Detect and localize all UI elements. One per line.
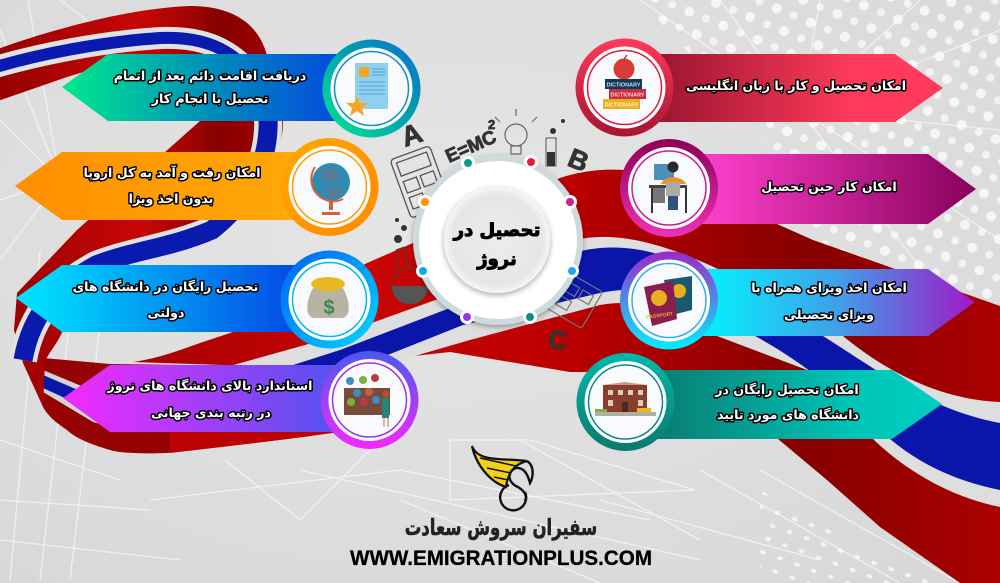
title: تحصیل در [453, 220, 540, 241]
panel: europe travel [15, 138, 378, 236]
title [453, 220, 540, 270]
panel: central hub [413, 155, 583, 325]
icon: classroom [344, 374, 390, 427]
icon: passports [644, 276, 692, 326]
icon circle [280, 250, 378, 348]
doodle: calculator [390, 146, 451, 218]
ribbon: white stripe [230, 237, 1000, 507]
text: امکان تحصیل و کار با زبان انگلیسی [686, 78, 906, 93]
ribbon: upper white stripe [0, 38, 268, 360]
doodle: letter B: B [564, 143, 593, 178]
hub: connector dots [418, 156, 578, 322]
icon: money bag [307, 277, 349, 319]
panel: permanent residence [62, 40, 420, 138]
text: در رتبه بندی جهانی [151, 405, 271, 420]
doodle: flask [392, 247, 428, 304]
text [714, 382, 860, 422]
text: امکان کار حین تحصیل [761, 179, 897, 194]
icon: dictionaries with apple: DICTIONARY [606, 82, 641, 88]
doodle: formula: E=MC [442, 127, 500, 168]
doodle: second calculator [547, 272, 603, 328]
text [751, 280, 907, 322]
icon: dictionaries with apple [603, 55, 646, 109]
icon: dictionaries with apple: DICTIONARY [610, 92, 645, 98]
panel: companion visa [620, 252, 975, 350]
banner [62, 54, 350, 121]
banner [15, 152, 300, 220]
text: تحصیل رایگان در دانشگاه های [73, 279, 258, 294]
doodle: black dots [394, 119, 565, 243]
text [73, 279, 258, 320]
panel: study and work in english [576, 38, 943, 136]
icon circle [620, 252, 718, 350]
icon circle [620, 139, 718, 237]
banner [650, 370, 942, 439]
icon circle [322, 40, 420, 138]
hub: white ring [419, 161, 577, 319]
banner [700, 154, 976, 224]
icon circle [280, 138, 378, 236]
doodle: formula exponent: 2 [488, 117, 495, 132]
text: دریافت اقامت دائم بعد از اتمام [114, 68, 307, 84]
text: امکان رفت و آمد به کل اروپا [83, 165, 261, 180]
icon: dictionaries with apple: DICTIONARY [604, 102, 639, 108]
text [114, 68, 307, 107]
text: بدون اخذ ویزا [129, 191, 213, 206]
icon circle [576, 353, 674, 451]
logo: wing [472, 446, 527, 487]
logo: company mark [472, 446, 533, 510]
text [107, 378, 312, 420]
icon: university building [595, 382, 656, 416]
doodle: letter C: C [546, 323, 570, 356]
text [83, 165, 261, 206]
text: امکان تحصیل رایگان در [714, 382, 859, 397]
banner [650, 54, 943, 122]
banner [16, 265, 300, 332]
panel: free study in public universities [16, 250, 378, 348]
text: ویزای تحصیلی [784, 307, 874, 322]
icon: globe [311, 163, 350, 215]
text: امکان اخذ ویزای همراه با [751, 280, 907, 295]
text: دولتی [148, 305, 185, 320]
panel: free study in accredited universities [576, 353, 942, 451]
icon: money bag: $ [323, 297, 335, 319]
hub: outer disc [413, 155, 583, 325]
website url: WWW.EMIGRATIONPLUS.COM [350, 546, 652, 570]
icon: person at desk [649, 162, 687, 213]
ribbon: upper blue stripe [0, 38, 268, 360]
panel: high university ranking [63, 351, 418, 449]
banner [700, 269, 975, 336]
icon circle [576, 38, 674, 136]
hub: inner disc [444, 187, 550, 293]
doodle: letter A: A [397, 117, 426, 153]
icon: document with star [346, 63, 388, 116]
ribbon: blue stripe [290, 248, 1000, 490]
doodles: education sketches [390, 109, 603, 356]
text: تحصیل با انجام کار [151, 91, 268, 107]
ribbon: lower left fold [43, 358, 345, 453]
title: نروژ [476, 249, 517, 270]
doodle: test tube [546, 138, 556, 166]
logo: wing feathers [480, 458, 516, 480]
text: دانشگاه های مورد تایید [717, 407, 860, 422]
text: استاندارد بالای دانشگاه های نروژ [107, 378, 312, 393]
logo: company name: سفیران سروش سعادت [405, 515, 597, 541]
doodle: light bulb [495, 109, 537, 154]
logo: bird s-curve [500, 461, 533, 510]
banner [63, 365, 350, 432]
panel: work while studying [620, 139, 976, 237]
ribbon: main red band [133, 170, 1000, 583]
ribbon: upper left band [0, 6, 283, 407]
icon: passports: PASSPORT [646, 311, 674, 321]
icon circle [320, 351, 418, 449]
